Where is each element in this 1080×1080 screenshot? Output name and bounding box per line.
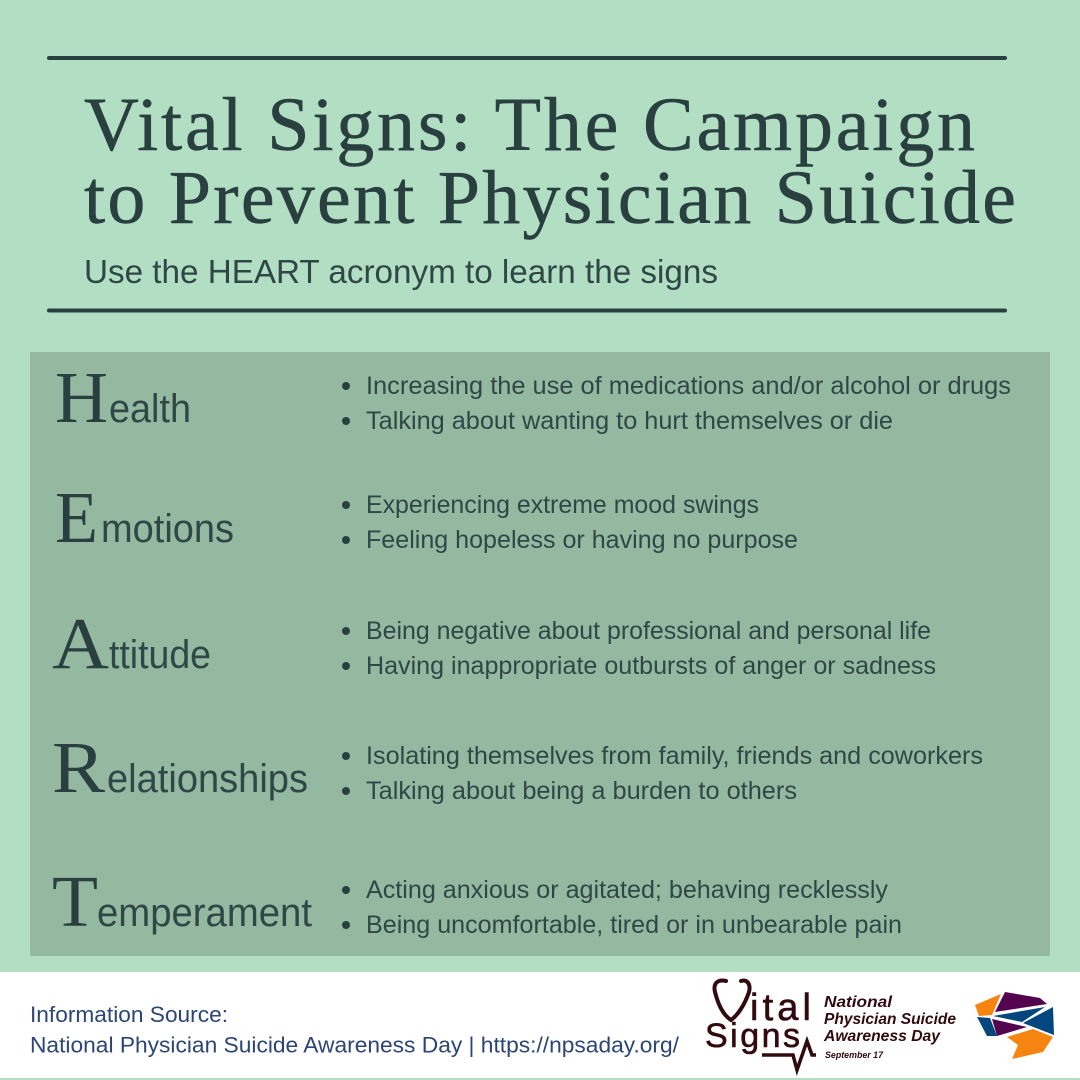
heading: Relationships	[52, 727, 308, 808]
logo text: National Physician Suicide Awareness Day: Physician Suicide	[824, 1011, 956, 1028]
heading: Temperament: emperament	[97, 891, 312, 935]
heading: Temperament: T	[52, 861, 98, 942]
bullet list: Temperament signs: Acting anxious or agitated; behaving recklessly	[366, 876, 888, 904]
bullet list: Relationships signs	[342, 742, 983, 805]
logo: Vital Signs: Signs	[705, 1017, 800, 1055]
bullet list: Emotions signs	[342, 491, 798, 554]
heading: Emotions: E	[55, 477, 98, 558]
logo: brain mark	[975, 992, 1054, 1059]
logo text: National Physician Suicide Awareness Day: National	[824, 994, 893, 1011]
source text: Information Source:	[30, 1002, 228, 1027]
row: Health	[55, 357, 1011, 438]
bullet list: Emotions signs: Experiencing extreme mood swings	[366, 491, 759, 519]
title	[84, 83, 1016, 240]
bullet list: Attitude signs: Having inappropriate outbursts of anger or sadness	[366, 652, 936, 680]
bullet list: Attitude signs: Being negative about professional and personal life	[366, 617, 931, 645]
title: to Prevent Physician Suicide	[84, 156, 1016, 240]
footer band	[0, 972, 1080, 1078]
row: Relationships	[52, 727, 983, 808]
logo text: National Physician Suicide Awareness Day	[823, 994, 956, 1060]
title: Vital Signs: The Campaign	[84, 83, 975, 167]
heading: Attitude	[52, 603, 211, 684]
panel: HEART signs	[30, 352, 1050, 956]
subtitle: Use the HEART acronym to learn the signs	[84, 253, 718, 290]
bullet list: Temperament signs	[342, 876, 902, 939]
bullet list: Emotions signs: Feeling hopeless or having no purpose	[366, 526, 798, 554]
row: Attitude	[52, 603, 936, 684]
source text	[30, 1002, 680, 1058]
heading: Temperament	[52, 861, 312, 942]
heading: Health: ealth	[109, 387, 191, 431]
bullet list: Attitude signs	[342, 617, 936, 680]
heading: Relationships: elationships	[107, 757, 308, 801]
bullet list: Health signs: Talking about wanting to hurt themselves or die	[366, 407, 893, 435]
heading: Relationships: R	[52, 727, 105, 808]
heading: Attitude: A	[52, 603, 109, 684]
heading: Health: H	[55, 357, 108, 438]
bullet list: Relationships signs: Isolating themselves from family, friends and coworkers	[366, 742, 983, 770]
logo: Vital Signs: ital	[750, 987, 811, 1029]
logo text: National Physician Suicide Awareness Day: September 17	[825, 1050, 884, 1060]
heading: Emotions: motions	[101, 507, 234, 551]
bullet list: Relationships signs: Talking about being a burden to others	[366, 777, 797, 805]
heading: Health	[55, 357, 191, 438]
heading: Attitude: ttitude	[109, 633, 211, 677]
source text: National Physician Suicide Awareness Day | https://npsaday.org/	[30, 1032, 680, 1058]
bullet list: Health signs	[342, 372, 1011, 435]
row: Temperament	[52, 861, 902, 942]
heading: Emotions	[55, 477, 234, 558]
row: Emotions	[55, 477, 798, 558]
bullet list: Health signs: Increasing the use of medications and/or alcohol or drugs	[366, 372, 1011, 400]
logo: Vital Signs	[705, 981, 816, 1070]
bullet list: Temperament signs: Being uncomfortable, tired or in unbearable pain	[366, 911, 902, 939]
logo text: National Physician Suicide Awareness Day: Awareness Day	[823, 1028, 941, 1045]
